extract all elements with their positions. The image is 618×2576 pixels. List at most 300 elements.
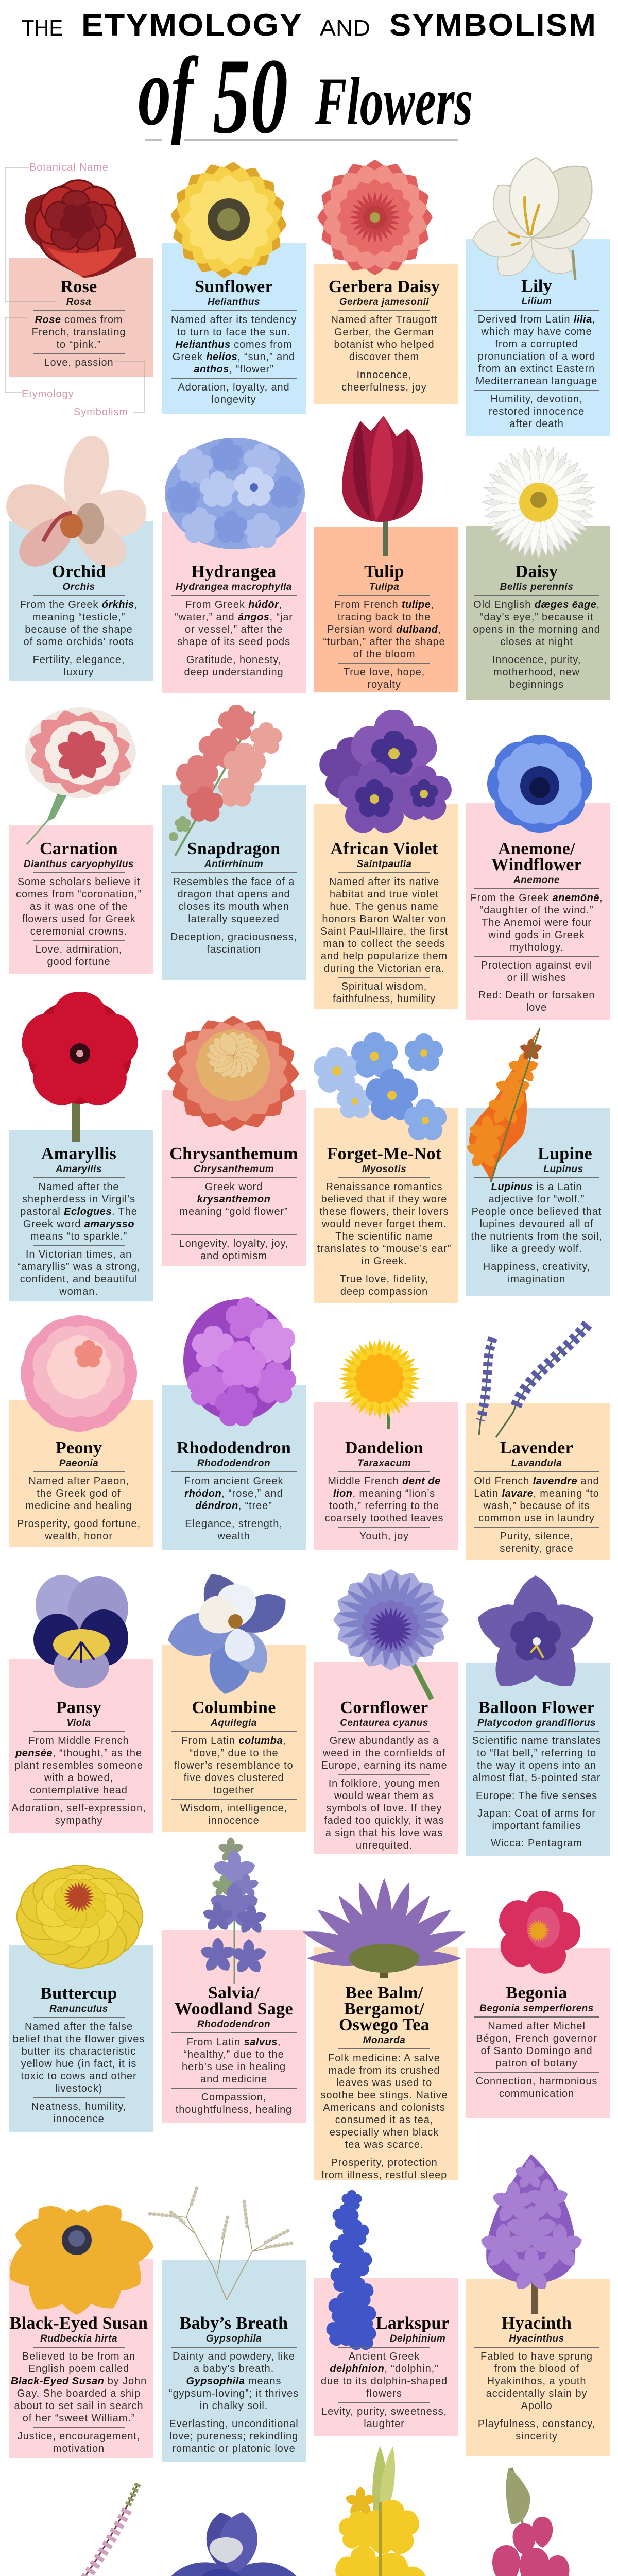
text: Chrysanthemum: Chrysanthemum [169,1144,298,1163]
text: Tulip: tracing back to the [338,611,431,622]
panel [9,2259,153,2458]
card: Cornflower [314,1572,458,1854]
text: Peony: Paeonia [59,1458,98,1469]
text: Hyacinth: Hyakinthos, a youth [487,2375,586,2386]
text: Daisy: closes at night [500,636,573,647]
panel [314,2278,458,2436]
icon: salvia [197,1840,265,1984]
text: Sunflower: Greek helios, “sun,” and [173,351,295,363]
text: Lavender: Lavender [500,1438,573,1458]
text: Gerbera Daisy: Named after Traugott [331,314,437,326]
text: African Violet: man to collect the seeds [323,938,445,949]
icon: foxglove [491,2468,570,2576]
text: Baby's Breath [162,2315,306,2458]
text: Forget-Me-Not: deep compassion [340,1286,428,1297]
text: African Violet: habitat and true violet [330,888,439,900]
panel [466,1948,610,2118]
text: Sunflower: Adoration, loyalty, and [178,382,290,393]
text: Hydrangea: Hydrangea [191,562,277,581]
icon: baby's breath [145,2187,293,2300]
text: Sunflower [171,277,297,405]
text: Amaryllis: Named after the [39,1181,119,1192]
card: Baby's Breath [162,2187,306,2462]
text: Cornflower: a sign that his love was [325,1827,443,1839]
text: Amaryllis: Amaryllis [41,1144,116,1163]
text: Bee Balm: Monarda [363,2035,405,2046]
text: Lupine: adjective for “wolf.” [489,1193,585,1205]
text: Carnation: Dianthus caryophyllus [24,859,134,870]
text: Buttercup: innocence [53,2113,105,2125]
text: Tulip [323,562,445,690]
text: Salvia: herb’s use in healing [182,2061,286,2072]
text: Salvia: Rhododendron [197,2019,270,2030]
text: Begonia: Named after Michel [488,2021,586,2032]
text: Sunflower: Helianthus comes from [175,339,293,350]
text: Hyacinth: Hyacinthus [509,2333,564,2344]
panel [466,526,610,700]
text: Columbine: innocence [208,1815,260,1826]
text: Balloon Flower: Platycodon grandiflorus [477,1718,596,1728]
text: Carnation [16,839,142,968]
card: Gladiolus [314,2446,458,2576]
card: Lily [466,157,610,436]
card: Bee Balm [314,1881,458,2180]
text: Hydrangea: From Greek húdōr, [185,599,282,610]
card: Black-Eyed Susan [9,2208,153,2458]
text: Anemone: wind gods in Greek [488,929,585,941]
text: Hydrangea: shape of its seed pods [177,636,290,647]
text: Columbine: “dove,” due to the [190,1748,278,1759]
text: Dandelion: lion, meaning “lion’s [333,1488,435,1499]
text: Rose: to “pink.” [57,339,101,350]
text: Dandelion: Youth, joy [359,1531,409,1542]
text: Chrysanthemum [162,1146,306,1265]
text: Rhododendron [162,1440,306,1545]
text: Chrysanthemum: Longevity, loyalty, joy, [179,1238,288,1249]
text: Bee Balm: soothe bee stings. Native [320,2090,448,2101]
text: Lily: from a corrupted [495,338,578,349]
text: Lupine: lupines devoured all of [480,1218,593,1229]
panel [314,804,458,1009]
text: Bee Balm: Oswego Tea [339,2015,430,2035]
text: Pansy: From Middle French [28,1735,129,1747]
icon: begonia [494,1889,577,1973]
text: Gerbera Daisy: Gerbera Daisy [329,277,440,296]
text: Salvia [162,1985,306,2119]
panel [162,512,306,693]
card: Tulip [314,416,458,692]
card: Hyacinth [466,2154,610,2456]
text: Tulip: royalty [367,679,401,690]
text: Columbine [162,1700,306,1829]
text: Anemone: love [526,1002,547,1013]
icon: chrysanthemum [165,1014,301,1133]
text: Rose: Rosa [66,297,91,308]
text: Black-Eyed Susan: Black-Eyed Susan by John [11,2375,147,2386]
text: Chrysanthemum: Chrysanthemum [194,1164,274,1175]
icon: larkspur [330,2193,372,2346]
text: Peony: Named after Paeon, [28,1476,129,1487]
text: Snapdragon: Antirrhinum [204,859,263,870]
text: Baby's Breath: a baby’s breath. [194,2363,274,2374]
card: Pansy [9,1575,153,1833]
icon: bee balm [313,1881,455,1978]
text: African Violet: Saint Paul-Illaire, the first [320,925,448,937]
text: Baby's Breath: Gypsophila means [186,2375,281,2386]
panel [466,803,610,1020]
text: Salvia: Salvia/ [208,1984,260,2003]
panel [162,2260,306,2462]
text: Forget-Me-Not: Myosotis [362,1164,406,1175]
text: Rhododendron: déndron, “tree” [195,1500,272,1512]
text: Black-Eyed Susan: Believed to be from an [22,2350,135,2362]
text: Salvia: Compassion, [201,2092,266,2103]
panel [466,1663,610,1856]
text: Sunflower: longevity [211,394,256,405]
text: Hydrangea: deep understanding [184,667,284,678]
text: Balloon Flower: Scientific name translates [472,1735,602,1747]
text: Anemone: Anemone/ [498,839,575,858]
text: Rhododendron: wealth [217,1531,250,1542]
card: Peony [9,1311,153,1547]
legend: how to read a card: Botanical Name [29,162,109,173]
card: Iris [162,2509,306,2576]
text: Begonia: patron of botany [496,2058,577,2069]
title: of [138,38,199,146]
text: Baby's Breath: Gypsophila [206,2333,262,2344]
text: Peony: Prosperity, good fortune, [17,1518,141,1530]
text: Anemone: From the Greek anemōnē, [471,892,603,904]
text: Rose: French, translating [32,327,126,338]
text: Black-Eyed Susan: of her “sweet William.” [23,2412,135,2424]
text: Anemone: “daughter of the wind.” [480,905,593,916]
panel [466,1108,610,1296]
card: Buttercup [9,1865,153,2132]
legend: how to read a card [0,160,154,417]
icon: rhododendron [177,1298,298,1429]
text: Balloon Flower: Japan: Coat of arms for [477,1808,596,1819]
text: Buttercup: Neatness, humility, [31,2101,126,2112]
text: Tulip: of the bloom [353,648,415,659]
text: Baby's Breath: “gypsum-loving”; it thrives [169,2387,299,2399]
card: Begonia [466,1889,610,2118]
text: Pansy: Pansy [56,1698,101,1717]
text: Columbine: Aquilegia [211,1718,257,1728]
panel [314,1108,458,1303]
icon: daisy [481,445,596,560]
text: Anemone: mythology. [510,942,563,953]
text: Balloon Flower: Wicca: Pentagram [491,1838,582,1849]
text: Black-Eyed Susan: Gay. She boarded a ship [17,2387,141,2399]
card: Gerbera Daisy [314,160,458,404]
text: Snapdragon: dragon that opens and [177,888,290,900]
text: Gerbera Daisy [329,277,440,393]
card: Salvia / Woodland Sage [162,1840,306,2123]
text: Cornflower [312,1700,456,1854]
text: Pansy: Viola [66,1718,91,1728]
text: Carnation: flowers used for Greek [22,913,136,924]
text: Columbine: flower’s resemblance to [174,1760,294,1771]
text: Forget-Me-Not: would never forget them. [322,1218,447,1229]
text: Carnation: Some scholars believe it [18,876,140,887]
text: Begonia: Connection, harmonious [476,2076,597,2087]
text: Snapdragon: Resembles the face of a [173,876,295,887]
text: Columbine: From Latin columba, [181,1735,286,1747]
text: Begonia: communication [499,2088,574,2099]
text: Salvia: thoughtfulness, healing [176,2104,292,2115]
panel [9,1130,153,1301]
text: Columbine: Wisdom, intelligence, [180,1803,287,1814]
icon: lily [472,157,593,280]
text: Amaryllis: Greek word amarysso [23,1218,134,1229]
title: 50 [213,37,288,155]
text: Baby's Breath: in chalky soil. [200,2400,268,2411]
icon: dandelion [339,1348,421,1429]
text: Pansy: plant resembles someone [14,1760,143,1771]
text: Forget-Me-Not: True love, fidelity, [340,1274,428,1285]
text: Anemone [471,839,603,1013]
text: Lily: restored innocence [489,406,585,417]
text: Daisy: Innocence, purity, [492,654,581,666]
text: Pansy: contemplative head [30,1785,128,1796]
text: Lily [474,277,599,430]
text: Rose: Love, passion [44,357,114,368]
text: Orchid: because of the shape [25,623,133,635]
text: Cornflower: weed in the cornfields of [323,1748,445,1759]
text: Bee Balm: Folk medicine: A salve [328,2053,440,2064]
text: Gerbera Daisy: botanist who helped [334,339,435,350]
text: Carnation: Love, admiration, [36,944,122,955]
text: Hyacinth [465,2315,609,2445]
card: Columbine [162,1576,306,1832]
panel [162,785,306,980]
text: Tulip: Persian word dulband, [327,623,441,635]
text: Peony: Peony [56,1438,102,1458]
title: AND [320,15,370,41]
text: Bee Balm: Bergamot/ [344,1999,424,2019]
icon: forget-me-not [319,1037,443,1140]
card: Balloon Flower [466,1575,610,1856]
text: Larkspur: delphínion, “dolphin,” [330,2363,439,2374]
card: Foxglove [466,2468,610,2576]
text: Columbine: Columbine [192,1698,276,1717]
panel [314,1947,458,2180]
text: Larkspur: due to its dolphin-shaped [321,2375,448,2386]
text: Salvia: “healthy,” due to the [183,2048,284,2060]
text: Balloon Flower: almost flat, 5-pointed star [473,1772,600,1784]
text: Snapdragon: Snapdragon [187,839,280,858]
text: Lily: Mediterranean language [476,375,597,386]
card: Rose [9,179,153,377]
text: Lily: Humility, devotion, [490,394,583,405]
text: Amaryllis: woman. [59,1286,98,1297]
text: Peony: the Greek god of [37,1488,121,1499]
text: Amaryllis: confident, and beautiful [20,1274,138,1285]
title: Flowers [315,63,473,139]
text: Amaryllis: “amaryllis” was a strong, [17,1261,141,1273]
text: Black-Eyed Susan: Justice, encouragement, [18,2431,140,2442]
text: Daisy: Daisy [516,562,558,581]
text: Bee Balm [312,1985,456,2184]
text: Rose: Rose comes from [35,314,123,326]
text: Bee Balm: leaves was used to [336,2077,432,2089]
text: African Violet: during the Victorian era. [324,962,444,974]
icon: hyacinth [483,2154,579,2314]
text: Lily: pronunciation of a word [478,350,595,362]
panel [9,1400,153,1547]
text: Daisy [473,562,600,690]
text: Sunflower: Helianthus [208,297,260,308]
text: Begonia: Begonia [506,1984,568,2003]
text: Bee Balm: tea was scarce. [345,2139,423,2150]
text: Lily: Lilium [522,296,552,307]
text: Buttercup: Named after the false [25,2021,133,2032]
text: Forget-Me-Not [312,1146,456,1300]
text: Amaryllis [17,1144,141,1297]
text: Peony: medicine and healing [25,1500,132,1512]
text: Balloon Flower: the way it opens into an [477,1760,596,1771]
text: Rose [32,277,126,368]
text: Begonia [465,1985,609,2103]
text: Cornflower: In folklore, young men [329,1778,440,1789]
text: Columbine: together [213,1785,254,1796]
panel [162,1385,306,1550]
icon: lupine [469,1028,542,1182]
panel [162,1090,306,1266]
text: Cornflower: Cornflower [340,1698,428,1717]
card: Chrysanthemum [162,1014,306,1266]
text: Daisy: “day’s eye,” because it [480,611,593,622]
text: Rhododendron: Rhododendron [177,1438,291,1458]
text: Pansy: sympathy [55,1815,102,1826]
text: Orchid: luxury [64,667,94,678]
text: Lupine [465,1146,609,1288]
text: Bee Balm: Prosperity, protection [331,2157,438,2168]
text: Forget-Me-Not: Forget-Me-Not [327,1144,441,1163]
text: Tulip: From French tulipe, [334,599,434,610]
text: African Violet: honors Baron Walter von [322,913,447,924]
icon: carnation [25,707,136,845]
text: African Violet: hue. The genus name [330,901,439,912]
text: Lavender: serenity, grace [500,1543,574,1554]
text: Lavender: Purity, silence, [500,1531,573,1542]
icon: lavender [469,1320,591,1437]
text: Dandelion [312,1440,456,1545]
card: Carnation [9,707,153,974]
text: Chrysanthemum: krysanthemon [197,1193,270,1205]
text: Columbine: five doves clustered [184,1772,284,1784]
text: Daisy: Bellis perennis [500,582,573,592]
text: Dandelion: coarsely toothed leaves [325,1513,443,1524]
icon: cornflower [331,1572,452,1699]
text: Hyacinth: sincerity [516,2431,558,2442]
icon: columbine [160,1576,288,1696]
icon: snapdragon [169,705,282,856]
text: Cornflower: unrequited. [356,1840,413,1851]
text: Begonia: Bégon, French governor [476,2033,597,2044]
text: Pansy [7,1700,151,1829]
text: Hydrangea: Gratitude, honesty, [186,654,281,666]
text: Carnation: comes from “coronation,” [16,888,142,900]
text: Forget-Me-Not: translates to “mouse’s ear” [317,1243,451,1254]
title: SYMBOLISM [389,8,597,42]
panel [314,527,458,692]
text: Sunflower: to turn to face the sun. [177,327,290,338]
text: Pansy: pensée, “thought,” as the [15,1748,142,1759]
text: Carnation: ceremonial crowns. [30,925,127,937]
text: Orchid: Orchis [62,582,95,592]
text: Sunflower: Sunflower [195,277,273,296]
text: Lavender: common use in laundry [478,1513,595,1524]
text: Cornflower: faded too quickly, it was [324,1815,444,1826]
text: African Violet [320,839,448,1005]
text: Black-Eyed Susan: Black-Eyed Susan [10,2314,148,2333]
text: Bee Balm: from illness, restful sleep [321,2170,447,2181]
text: Lupine: Lupine [538,1144,592,1163]
text: Hyacinth: Fabled to have sprung [480,2350,593,2362]
text: Hydrangea: “water,” and ángos, “jar [175,611,293,622]
text: Begonia: Begonia semperflorens [479,2003,594,2014]
text: Lily: which may have come [482,326,592,337]
text: Pansy: Adoration, self-expression, [11,1803,146,1814]
text: Lavender [465,1440,609,1557]
text: Larkspur: Larkspur [376,2314,449,2333]
text: Lily: Derived from Latin lilia, [478,313,595,325]
text: Gerbera Daisy: cheerfulness, joy [341,382,427,393]
text: Lily: from an extinct Eastern [478,363,595,374]
text: African Violet: African Violet [330,839,438,858]
text: Buttercup: Buttercup [40,1984,117,2003]
text: Snapdragon: fascination [207,944,261,955]
text: Pansy: with a bowed, [44,1772,113,1784]
title [22,8,597,155]
panel [314,264,458,404]
text: Rhododendron: rhódon, “rose,” and [184,1488,283,1499]
text: Dandelion: Taraxacum [357,1458,411,1469]
text: Amaryllis: shepherdess in Virgil’s [22,1193,135,1205]
text: Chrysanthemum: meaning “gold flower” [179,1206,288,1217]
text: Cornflower: Centaurea cyanus [340,1718,428,1728]
text: Carnation: good fortune [47,956,111,968]
text: Lupine: like a greedy wolf. [491,1243,582,1254]
text: Gerbera Daisy: Innocence, [357,369,411,381]
text: Larkspur: Levity, purity, sweetness, [321,2406,447,2417]
panel [9,258,153,377]
panel [314,1402,458,1550]
text: Gerbera Daisy: Gerber, the German [334,327,434,338]
text: Salvia: Woodland Sage [175,1999,293,2019]
text: Larkspur [312,2315,456,2433]
text: Buttercup [7,1986,151,2128]
text: Hyacinth: from the blood of [494,2363,579,2374]
card: Snapdragon [162,705,306,980]
text: Amaryllis: means “to sparkle.” [30,1230,127,1242]
text: Baby's Breath: romantic or platonic love [172,2443,296,2454]
text: Bee Balm: consumed it as tea, [335,2114,433,2126]
text: Hydrangea [171,562,297,678]
text: Anemone: or ill wishes [507,972,566,984]
text: Amaryllis: pastoral Eclogues. The [20,1206,138,1217]
icon: orchid [6,436,146,568]
text: African Violet: Saintpaulia [357,859,411,870]
text: Peony: wealth, honor [45,1531,113,1542]
icon: heather [22,2484,138,2576]
text: Buttercup: toxic to cows and other [21,2070,137,2081]
text: Bee Balm: Bee Balm/ [346,1984,423,2003]
text: Begonia: of Santo Domingo and [480,2045,593,2057]
icon: buttercup [8,1865,151,1970]
text: Anemone: Windflower [491,855,582,874]
